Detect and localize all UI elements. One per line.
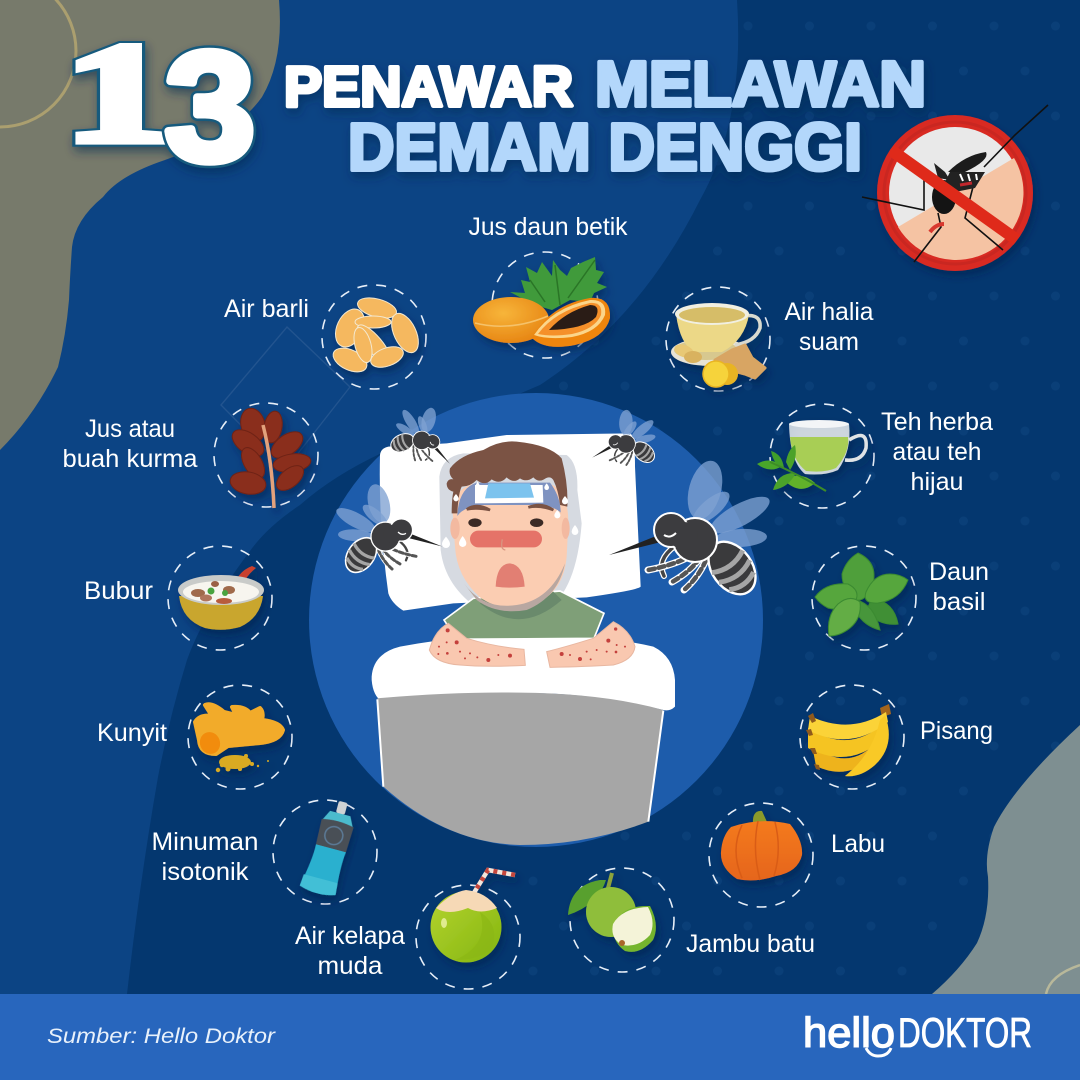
mosquito: top left (380, 394, 471, 481)
item: Air barli (322, 285, 426, 389)
mosquito: left (333, 482, 442, 578)
item: Jus atau buah kurma (214, 403, 318, 508)
title heading: PENAWAR (284, 55, 573, 119)
icon: dates (228, 405, 312, 508)
label: Jus atau buah kurma: Jus atau (85, 415, 175, 443)
arms with rash (429, 622, 635, 667)
icon: barley grains (329, 294, 424, 377)
icon: pumpkin (721, 811, 802, 880)
source text: Sumber: Hello Doktor (47, 1025, 276, 1048)
label: Air halia suam: suam (799, 328, 859, 356)
label: Teh herba atau teh hijau: atau teh (892, 438, 982, 466)
label: Teh herba atau teh hijau (881, 408, 993, 496)
label: Minuman isotonik: isotonik (162, 858, 249, 886)
label: Jambu batu: Jambu batu (686, 930, 815, 958)
icon: coconut (430, 870, 515, 962)
blob: top left olive (0, 0, 280, 450)
mosquito: top right (584, 403, 664, 477)
title heading: DEMAM DENGGI (348, 110, 862, 185)
item: Pisang (800, 685, 904, 789)
footer bar (0, 994, 1080, 1080)
patient figure (372, 433, 675, 845)
logo: DOKTOR (898, 1009, 1032, 1056)
title number 13: 3 (165, 20, 255, 193)
label: Air kelapa muda: Air kelapa (295, 922, 405, 950)
background circle (309, 393, 763, 847)
label: Bubur: Bubur (84, 577, 153, 605)
label: Minuman isotonik: Minuman (152, 828, 258, 856)
icon: no mosquito sign (862, 105, 1048, 271)
title heading (284, 48, 926, 185)
label: Air kelapa muda (295, 922, 405, 980)
item: Daun basil (812, 546, 916, 650)
title heading: MELAWAN (595, 48, 926, 120)
title number 13: 1 (64, 14, 172, 172)
label: Teh herba atau teh hijau: Teh herba (881, 408, 993, 436)
label: Kunyit: Kunyit (97, 719, 167, 747)
item: Kunyit (188, 685, 292, 789)
label: Air barli: Air barli (224, 295, 309, 323)
logo: hello (803, 1009, 895, 1056)
label: Jus daun betik: Jus daun betik (468, 213, 628, 241)
item: Bubur (168, 546, 272, 650)
icon: papaya (473, 257, 610, 347)
label: Minuman isotonik (152, 828, 258, 886)
label: Air halia suam: Air halia (784, 298, 874, 326)
illustration: sick patient in bed (309, 393, 774, 847)
icon: green tea (757, 420, 866, 491)
icon: turmeric (195, 704, 283, 772)
label: Daun basil (929, 558, 989, 616)
mosquito: right large (609, 457, 774, 603)
item: Jus daun betik (473, 252, 610, 358)
label: Labu: Labu (831, 830, 885, 858)
title number 13: 1 (64, 14, 172, 172)
logo (803, 1009, 1032, 1056)
label: Air halia suam (784, 298, 874, 356)
item: Air halia suam (666, 287, 770, 391)
label: Daun basil: basil (932, 588, 986, 616)
item: Air kelapa muda (416, 870, 520, 989)
label: Jus atau buah kurma: buah kurma (62, 445, 198, 473)
title number 13: 3 (165, 20, 255, 193)
item: Minuman isotonik (273, 797, 377, 904)
label: Daun basil: Daun (929, 558, 989, 586)
icon: guava (568, 873, 656, 952)
label: Air kelapa muda: muda (318, 952, 383, 980)
label: Jus atau buah kurma (62, 415, 198, 473)
item: Jambu batu (568, 868, 674, 972)
title number 13 (64, 14, 255, 193)
item: Labu (709, 803, 813, 907)
blob: bottom right grey (932, 725, 1080, 994)
label: Pisang: Pisang (920, 717, 993, 745)
item: Teh herba (757, 404, 874, 508)
icon: ginger tea (671, 303, 765, 387)
head (442, 441, 578, 611)
icon: porridge bowl (178, 566, 264, 630)
label: Teh herba atau teh hijau: hijau (910, 468, 964, 496)
icon: basil leaves (815, 553, 908, 636)
icon: bananas (806, 704, 891, 776)
icon: sports bottle (299, 797, 359, 898)
